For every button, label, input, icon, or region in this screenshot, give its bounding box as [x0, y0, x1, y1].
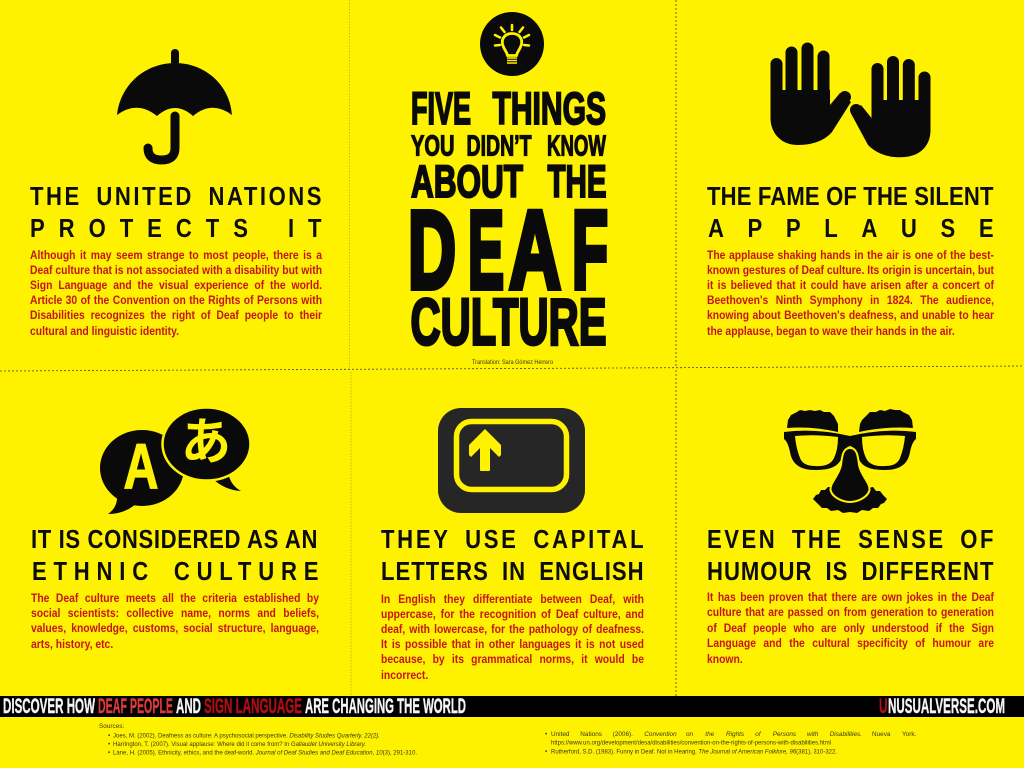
- body text: In English they differentiate between Deaf, with: [381, 592, 644, 606]
- body text: [30, 248, 322, 338]
- body text: It is possible that in other languages it is not used: [381, 637, 644, 651]
- sources: left column: [99, 723, 417, 756]
- sources: right column: with: [807, 731, 819, 738]
- heading: IT IS CONSIDERED AS AN: [31, 525, 317, 554]
- main title: F: [572, 189, 608, 312]
- heading: THE UNITED NATIONS: [30, 182, 322, 211]
- sources: right column: Nueva: [872, 731, 891, 738]
- translation credit: Translation: Sara Gómez Herrero: [472, 360, 554, 366]
- main title: A: [509, 189, 561, 312]
- icon: speech bubbles: あ: [181, 402, 231, 474]
- main title: YOU: [411, 130, 454, 162]
- footer banner: [0, 696, 1024, 717]
- sources: right column: •: [545, 731, 547, 738]
- sources: right column: Convention: [644, 731, 677, 738]
- sources: right column: Nations: [580, 731, 602, 738]
- heading: HUMOUR IS DIFFERENT: [707, 557, 994, 586]
- body text: Disabilities recognizes the right of Deaf people to their: [30, 308, 322, 322]
- body text: The Deaf culture meets all the criteria established by: [31, 590, 319, 604]
- body text: [707, 248, 994, 338]
- body text: The applause shaking hands in the air is one of the best-: [707, 248, 994, 262]
- sources: right column: of: [755, 731, 762, 738]
- body text: cultural and linguistic identity.: [30, 324, 179, 338]
- icon: waving hands: [770, 48, 930, 157]
- body text: Although it may seem strange to most people, there is a: [30, 248, 322, 262]
- body text: of Deaf people who are only understood if the Sign: [707, 621, 994, 635]
- body text: culture that are passed on from generation to generation: [707, 605, 994, 619]
- main title: THINGS: [492, 83, 606, 134]
- body text: [707, 590, 994, 666]
- heading: [30, 182, 322, 243]
- heading: [707, 182, 994, 243]
- sources: left column: Sources:: [99, 723, 124, 730]
- sources: right column: York.: [902, 731, 917, 738]
- icon: shift key: [438, 408, 585, 513]
- heading: THEY USE CAPITAL: [381, 525, 644, 554]
- body text: [381, 592, 644, 682]
- sources: right column: [545, 731, 917, 756]
- heading: [31, 525, 318, 586]
- sources: left column: •: [108, 741, 110, 748]
- heading: EVEN THE SENSE OF: [707, 525, 993, 554]
- main title: FIVE: [411, 83, 471, 134]
- main title: KNOW: [547, 130, 606, 162]
- body text: Beethoven's Ninth Symphony in 1824. The audience,: [707, 293, 994, 307]
- body text: social scientists: collective name, norms and beliefs,: [31, 606, 319, 620]
- body text: Sign Language and the visual experience of the world.: [30, 278, 322, 292]
- body text: known gestures of Deaf culture. Its origin is uncertain, but: [707, 263, 994, 277]
- body text: Article 30 of the Convention on the Rights of Persons with: [30, 293, 322, 307]
- main title: E: [468, 189, 504, 312]
- heading: PROTECTS IT: [30, 214, 322, 243]
- body text: the applause, began to wave their hands in the air.: [707, 324, 955, 338]
- panel: capital letters: [381, 408, 644, 682]
- panel: ethnic culture: [31, 402, 319, 651]
- body text: deaf, with lowercase, for the pathology of deafness.: [381, 622, 644, 636]
- sources: left column: Harrington, T. (2007). Visual applause: Where did it come from? In Gallaudet University Library.: [113, 741, 366, 748]
- panel: sense of humour: [707, 409, 994, 666]
- sources: [99, 723, 917, 756]
- main title: ABOUT: [411, 156, 523, 207]
- panel: title: [408, 12, 608, 366]
- body text: incorrect.: [381, 668, 428, 682]
- icon: umbrella: [117, 53, 232, 160]
- sources: right column: Rutherford, S.D. (1983). Funny in Deaf. Not in Hearing. The Journal of American Folklore, 96(381), 310-322.: [551, 748, 837, 756]
- body text: because, by its grammatical norms, it would be: [381, 652, 644, 666]
- icon: speech bubbles: [100, 402, 250, 514]
- body text: [31, 590, 319, 651]
- sources: right column: •: [545, 748, 547, 756]
- sources: left column: Lane, H. (2005). Ethnicity, ethics, and the deaf-world. Journal of Deaf Studies and Deaf Education, 10(3), 291-310.: [113, 750, 417, 756]
- heading: THE FAME OF THE SILENT: [707, 182, 994, 211]
- body text: Language and the cultural specificity of humour are: [707, 636, 994, 650]
- sources: right column: (2006).: [613, 731, 633, 738]
- heading: LETTERS IN ENGLISH: [381, 557, 644, 586]
- main title: D: [408, 189, 456, 312]
- panel: the fame of the silent applause: [707, 42, 994, 338]
- body text: values, knowledge, customs, social structure, language,: [31, 621, 319, 635]
- main title: DIDN’T: [466, 130, 532, 162]
- body text: Deaf culture that is not associated with a disability but with: [30, 263, 322, 277]
- body text: It has been proven that there are own jokes in the Deaf: [707, 590, 994, 604]
- heading: [707, 525, 994, 586]
- panel: the United Nations protects it: [30, 49, 322, 338]
- body text: it is believed that it could have arisen after a concert of: [707, 278, 994, 292]
- body text: knowing about Beethoven's deafness, and unable to hear: [707, 308, 994, 322]
- sources: left column: •: [108, 732, 110, 740]
- sources: right column: the: [705, 731, 715, 738]
- sources: left column: Joes, M. (2002). Deafness as culture: A psychosocial perspective. Disability Studies Quarterly. 22(2).: [113, 732, 380, 740]
- sources: right column: on: [686, 731, 694, 738]
- icon: light bulb: [480, 12, 544, 76]
- sources: left column: •: [108, 750, 110, 756]
- body text: known.: [707, 652, 743, 666]
- main title: THE: [548, 156, 606, 207]
- body text: arts, history, etc.: [31, 637, 113, 651]
- icon: disguise glasses: [784, 409, 916, 513]
- sources: right column: Persons: [773, 731, 797, 738]
- icon: speech bubbles: A: [124, 430, 158, 502]
- heading: ETHNIC CULTURE: [32, 557, 318, 586]
- sources: right column: https://www.un.org/development/desa/disabilities/convention-on-the-rights-of-persons-with-disabilities.html: [551, 740, 831, 746]
- sources: right column: Disabilities.: [830, 731, 862, 738]
- heading: [381, 525, 644, 586]
- sources: right column: United: [551, 731, 570, 738]
- heading: APPLAUSE: [708, 214, 994, 243]
- sources: right column: Rights: [726, 731, 745, 738]
- body text: uppercase, for the recognition of Deaf culture, and: [381, 607, 644, 621]
- main title: [408, 83, 608, 358]
